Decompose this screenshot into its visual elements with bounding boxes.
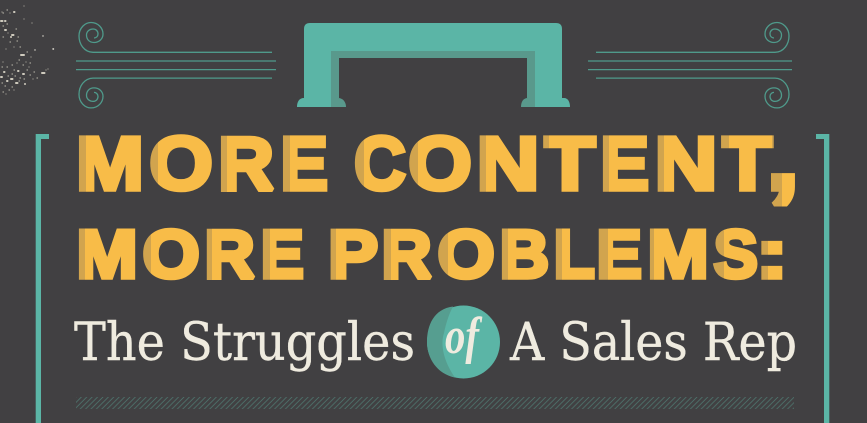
title: line two: B bbox=[500, 216, 549, 292]
title: line one: E bbox=[280, 122, 328, 206]
subtitle: right part: A Sales Rep bbox=[509, 313, 797, 373]
title: line one: N bbox=[476, 122, 539, 206]
hatched divider bbox=[76, 397, 794, 409]
title: line two: R bbox=[204, 216, 255, 292]
title: line one: M bbox=[76, 122, 144, 206]
title: line one: T bbox=[545, 122, 595, 206]
title: line one: O bbox=[149, 122, 213, 206]
paint splatter bbox=[1, 6, 54, 94]
title: line two: R bbox=[382, 216, 432, 292]
left bracket bbox=[36, 134, 49, 423]
title: line two: E bbox=[261, 216, 304, 292]
ornament: left flourish bbox=[76, 22, 276, 108]
title: line two: O bbox=[143, 216, 200, 292]
title: line two: O bbox=[438, 216, 495, 292]
title: line one: E bbox=[600, 122, 649, 206]
right bracket bbox=[816, 134, 829, 423]
icon: briefcase handle bbox=[297, 23, 570, 110]
title: line two: : bbox=[755, 216, 789, 292]
title: line one: , bbox=[766, 104, 800, 210]
title: line two: M bbox=[76, 216, 138, 292]
title: line one: C bbox=[354, 122, 406, 206]
title: line two: P bbox=[328, 216, 378, 292]
title: line two: M bbox=[648, 216, 709, 292]
subtitle: left part: The Struggles bbox=[74, 313, 415, 373]
title: line two: E bbox=[596, 216, 642, 292]
title: line one: O bbox=[408, 122, 472, 206]
of badge: of bbox=[445, 308, 483, 365]
title: line two: S bbox=[714, 216, 758, 292]
ornament: right flourish bbox=[588, 22, 792, 108]
title: line one: R bbox=[218, 122, 274, 206]
of badge bbox=[427, 306, 500, 378]
title: line one: N bbox=[654, 122, 717, 206]
title: line two: L bbox=[554, 216, 595, 292]
title: line one: T bbox=[723, 122, 772, 206]
